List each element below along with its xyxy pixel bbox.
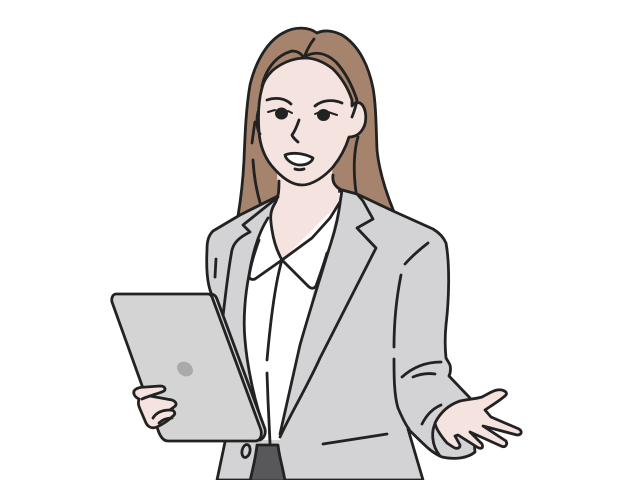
jacket body [207, 160, 475, 480]
hair [238, 28, 394, 216]
nose [292, 120, 299, 142]
shirt collar [249, 240, 327, 288]
shirt [243, 192, 342, 440]
tablet camera dot [174, 359, 196, 379]
right open hand [435, 390, 521, 448]
left lapel [223, 197, 278, 428]
tablet [112, 294, 265, 441]
skin: neck and chest [270, 160, 340, 260]
lower lip [295, 168, 304, 171]
skirt [250, 445, 285, 480]
left eye [268, 108, 292, 120]
right lapel [280, 190, 376, 437]
jacket button [241, 444, 251, 458]
mouth [285, 153, 313, 165]
hairline [262, 39, 357, 117]
right eye [315, 109, 337, 121]
eyebrows [267, 98, 342, 106]
jacket seams and arm lines [215, 243, 441, 444]
left hand holding tablet [134, 386, 176, 428]
jacket cuff [433, 422, 440, 456]
face [257, 39, 366, 185]
shirt placket [267, 260, 282, 443]
